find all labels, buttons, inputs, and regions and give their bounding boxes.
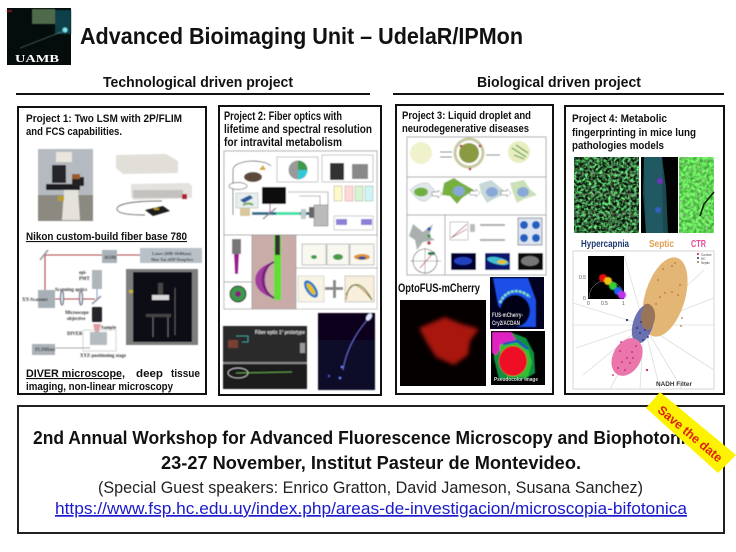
panel: workshop announcement: [18, 406, 724, 533]
diagram: DIVER optical path: Laser (690-1040nm): [152, 251, 192, 256]
project 2 title: lifetime and spectral resolution: [224, 124, 372, 136]
diagram: DIVER optical path: Scanning optics: [55, 288, 87, 293]
caption: Nikon custom-build: Nikon custom-build fiber base 780: [26, 231, 187, 243]
project 2 title: Project 2: Fiber optics with: [224, 111, 342, 123]
diagram: DIVER optical path: XY-Scanner: [22, 298, 49, 303]
legend: tissue labels: [581, 239, 707, 250]
logo: UAMB: [7, 8, 71, 65]
caption: DIVER microscope: DIVER microscope,: [26, 368, 125, 380]
image: pseudocolor: Pseudocolor Image: [494, 377, 539, 383]
legend: tissue labels: CTR: [691, 239, 707, 250]
label: OptoFUS-mCherry: OptoFUS-mCherry: [398, 283, 480, 295]
workshop title: 2nd Annual Workshop for Advanced Fluorescence Microscopy and Biophotonics: [33, 428, 705, 448]
panel: project 1: [18, 107, 206, 394]
caption: DIVER microscope: tissue: [171, 368, 200, 380]
image: FUS-mCherry-Cry2/ACDAN: [490, 277, 544, 329]
inset: phasor universal circle: 0.5: [579, 275, 586, 281]
photo: fiber optic prototype: Fiber optic 1° prototype: [255, 330, 305, 336]
project 1 title: [26, 113, 182, 138]
chart legend: Septic: [701, 261, 710, 265]
image: red mCherry cell: [400, 300, 486, 386]
legend: tissue labels: Hypercapnia: [581, 239, 629, 250]
inset: phasor universal circle: 1: [622, 301, 625, 307]
diagram: DIVER optical path: FLIMbox: [35, 348, 56, 353]
chart legend: [697, 253, 712, 265]
project 1 title: Project 1: Two LSM with 2P/FLIM: [26, 113, 182, 125]
panel: project 3: [396, 105, 553, 394]
image: control tissue: [679, 157, 714, 233]
guest speakers: (Special Guest speakers: Enrico Gratton, David Jameson, Susana Sanchez): [98, 478, 643, 497]
heading: technological projects: Technological driven project: [103, 74, 293, 91]
image: hypercapnia tissue: [574, 157, 639, 233]
chart legend: Control: [701, 253, 712, 257]
image: FUS-mCherry-Cry2/ACDAN: FUS-mCherry-: [492, 313, 523, 319]
photo: DIVER instrument: [126, 269, 198, 345]
photo: Nikon microscope: [38, 149, 93, 221]
heading: biological projects: Biological driven project: [477, 74, 641, 91]
diagram: DIVER optical path: XYZ-positioning stage: [80, 354, 126, 359]
diagram: DIVER optical path: Sample: [101, 326, 116, 331]
caption: DIVER microscope: deep: [136, 368, 163, 380]
logo: UAMB: UAMB: [15, 53, 60, 65]
inset: phasor universal circle: 0: [587, 301, 590, 307]
photo: fiber optic prototype: [223, 326, 307, 389]
image: septic tissue: [641, 157, 678, 233]
project 4 title: Project 4: Metabolic: [572, 113, 667, 125]
diagram: DIVER optical path: Mai Tai eHP DeepSee: [151, 257, 193, 262]
panel: project 4: [565, 106, 724, 394]
project 2 title: for intravital metabolism: [224, 137, 342, 149]
title: Advanced Bioimaging Unit – UdelaR/IPMon: [80, 23, 523, 49]
project 3 title: [402, 110, 531, 135]
diagram: fiber optics setup: [224, 151, 377, 309]
ribbon: Save the date: Save the date: [655, 403, 725, 465]
ribbon: Save the date: [646, 392, 736, 473]
photo: laser units: [116, 154, 192, 216]
project 3 title: Project 3: Liquid droplet and: [402, 110, 531, 122]
project 4 title: fingerprinting in mice lung: [572, 127, 696, 139]
diagram: DIVER optical path: DIVER: [67, 332, 83, 337]
inset: phasor universal circle: 0: [583, 296, 586, 302]
diagram: DIVER optical path: epi-: [79, 271, 87, 276]
project 2 title: [224, 111, 372, 149]
chart legend: HC: [701, 257, 706, 261]
image: pseudocolor: [491, 331, 545, 385]
label: NADH Filter: NADH Filter: [656, 381, 692, 388]
panel: project 2: [219, 106, 381, 395]
diagram: liquid droplet phase transition: [407, 137, 546, 275]
project 3 title: neurodegenerative diseases: [402, 123, 529, 135]
diagram: DIVER optical path: [22, 248, 202, 359]
diagram: DIVER optical path: objective: [67, 317, 85, 322]
workshop URL: https://www.fsp.hc.edu.uy/index.php/areas-de-investigacion/microscopia-bifotonica: [55, 499, 688, 518]
diagram: DIVER optical path: PMT: [79, 277, 90, 282]
inset: phasor universal circle: [579, 256, 626, 307]
workshop date and place: 23-27 November, Institut Pasteur de Montevideo.: [161, 453, 581, 473]
diagram: DIVER optical path: Microscope: [65, 311, 89, 316]
diagram: DIVER optical path: AOM: [104, 256, 116, 261]
project 4 title: pathologies models: [572, 140, 664, 152]
project 4 title: [572, 113, 696, 152]
project 1 title: and FCS capabilities.: [26, 126, 122, 138]
caption: DIVER microscope: [26, 368, 200, 393]
chart: NADH phasor plot: [573, 251, 714, 389]
inset: phasor universal circle: 0.5: [601, 301, 608, 307]
photo: blue fiber light: [318, 312, 375, 390]
image: FUS-mCherry-Cry2/ACDAN: Cry2/ACDAN: [492, 321, 520, 327]
legend: tissue labels: Septic: [649, 239, 674, 250]
caption: DIVER microscope: imaging, non-linear microscopy: [26, 381, 174, 393]
